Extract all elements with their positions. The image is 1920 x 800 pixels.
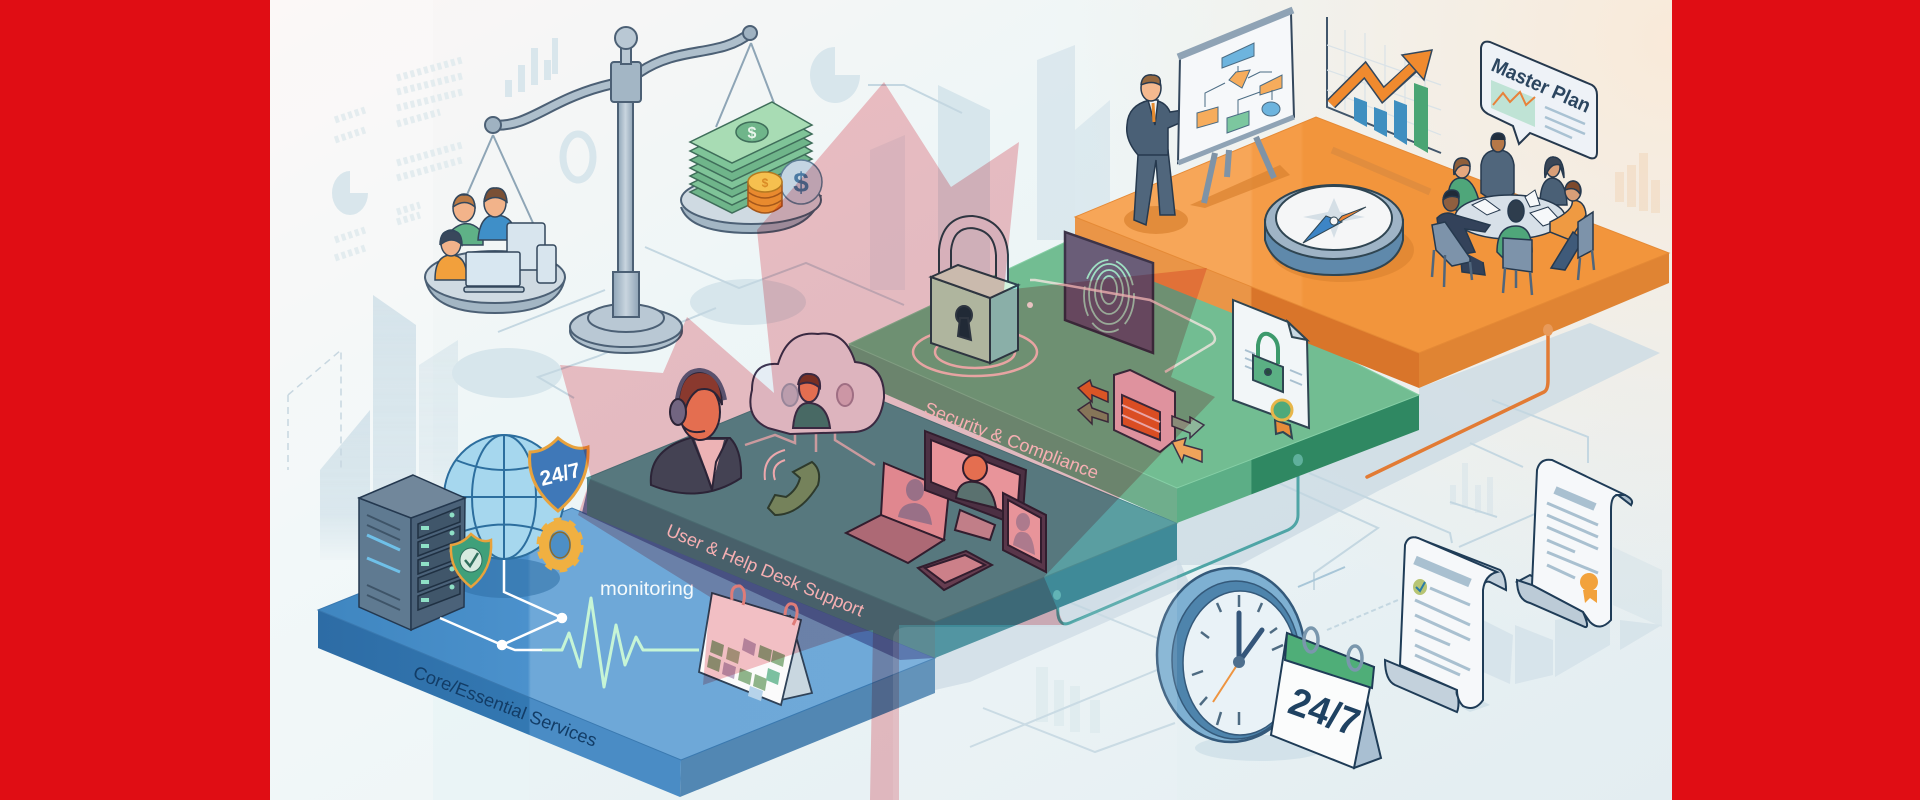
ghost floor ellipses — [452, 279, 806, 398]
presenter legs — [1134, 150, 1175, 225]
icon: meeting table group — [1432, 133, 1594, 295]
icon: people and devices on pan — [435, 188, 556, 292]
icon: growth chart — [1327, 17, 1441, 153]
24/7 calendar number: 24/7 — [1283, 680, 1365, 745]
presenter torso — [1127, 100, 1198, 155]
lock shackle — [945, 222, 1002, 295]
ghost buildings left — [288, 295, 458, 560]
monitoring network lines — [440, 560, 566, 650]
canvas background — [270, 0, 1672, 800]
compass needle — [1334, 207, 1366, 225]
person green — [447, 194, 483, 245]
connector: orange line — [1367, 333, 1548, 477]
icon: cloud with users — [750, 334, 884, 434]
icon: firewall — [1078, 370, 1204, 462]
master plan title: Master Plan — [1488, 54, 1594, 118]
icon: green shield check — [451, 534, 491, 587]
right chair — [1578, 212, 1594, 280]
icon: gear — [540, 521, 580, 569]
ghost buildings top centre — [870, 45, 1110, 290]
standing man — [1481, 133, 1514, 197]
person orange — [435, 230, 467, 280]
maple leaf overlay — [560, 82, 1215, 800]
label: User & Help Desk Support: User & Help Desk Support — [663, 520, 867, 621]
icon: balance scale — [425, 26, 821, 353]
left pan — [425, 277, 565, 313]
agent body — [651, 438, 741, 494]
icon: money stack and coins: $ — [762, 176, 769, 190]
firewall arrows — [1078, 380, 1204, 462]
icon: presentation board — [1178, 10, 1294, 203]
icon: money stack and coins — [690, 102, 822, 213]
table — [1455, 195, 1565, 239]
icon: clock — [1157, 568, 1305, 742]
platform: security and compliance (green) — [849, 230, 1419, 523]
documents on table — [1472, 190, 1560, 226]
clock ticks — [1192, 595, 1283, 725]
ghost ring — [563, 134, 593, 180]
icon: compliance document — [1233, 300, 1309, 438]
laptop base — [464, 287, 524, 292]
centre chair — [1503, 238, 1532, 295]
agent head — [680, 384, 720, 440]
tablet — [507, 223, 545, 270]
ghost bar chart top — [505, 38, 558, 97]
scroll one text lines — [1415, 560, 1470, 675]
floor shadow under scrolls — [1390, 665, 1490, 712]
scale strings — [466, 43, 774, 223]
scale base — [570, 100, 682, 353]
server side stripes — [367, 535, 400, 572]
ghost bars peach — [1615, 153, 1660, 213]
floor shadow under teal platform — [935, 555, 1190, 690]
pointer — [1196, 80, 1211, 105]
left chair — [1432, 222, 1472, 287]
silver coin — [780, 160, 822, 204]
circuit lines — [498, 85, 1588, 752]
red left margin — [0, 0, 270, 800]
right pan — [681, 195, 821, 233]
icon: contract scroll one — [1385, 537, 1506, 712]
ribbon — [1275, 420, 1292, 438]
icon: 24/7 calendar — [1271, 628, 1381, 768]
person blue — [478, 188, 515, 240]
scroll two seal — [1580, 573, 1598, 591]
heartbeat line — [542, 598, 699, 687]
label: monitoring: monitoring — [600, 579, 694, 600]
icon: compass — [1265, 185, 1403, 275]
icon: money stack and coins: $ — [748, 125, 757, 142]
connector: teal line — [1057, 460, 1298, 624]
gold coin stack — [748, 182, 782, 213]
floor shadow under clock — [1195, 735, 1325, 761]
icon: laptop — [846, 463, 949, 563]
icon: padlock — [913, 222, 1037, 376]
platform: strategy (orange) — [1075, 117, 1669, 388]
scroll two text lines — [1547, 490, 1598, 578]
man centre — [1497, 200, 1532, 258]
floor shadow under platforms — [1177, 323, 1660, 565]
platform: core/essential services (blue) — [318, 508, 935, 797]
icon: help desk agent — [651, 370, 741, 494]
icon: globe — [444, 435, 564, 559]
shadow cast on blue platform — [582, 478, 935, 660]
woman left — [1448, 158, 1480, 215]
ghost dot grid — [335, 60, 462, 258]
icon: tablet — [1003, 493, 1046, 572]
woman right — [1540, 157, 1567, 205]
ghost blocks lower right — [1483, 547, 1662, 684]
presenter head — [1141, 75, 1161, 101]
shadow under globe — [450, 558, 560, 598]
scale joint — [611, 62, 641, 102]
flowchart — [1197, 43, 1282, 133]
man left — [1437, 190, 1490, 275]
agent headset — [676, 370, 725, 410]
cloud user — [793, 403, 830, 428]
label: Security & Compliance: Security & Compliance — [922, 398, 1101, 483]
red right margin — [1672, 0, 1920, 800]
callout: master plan — [1481, 42, 1597, 158]
ghost pie charts — [332, 47, 860, 215]
cloud connectors — [745, 425, 875, 465]
icon: desktop monitor — [925, 431, 1026, 540]
platform: user and help desk support (teal) — [587, 379, 1177, 658]
icon: server rack — [359, 475, 465, 630]
icon: fingerprint tile — [1027, 232, 1215, 372]
icon: contract scroll two — [1517, 460, 1632, 627]
laptop — [466, 252, 520, 286]
server drive bays — [418, 507, 460, 610]
connector nodes — [1053, 324, 1553, 600]
background: city skyline and ghost charts — [288, 38, 1662, 733]
lock body — [990, 285, 1018, 363]
icon: 24/7 shield — [530, 438, 588, 511]
calendar cells — [707, 638, 785, 701]
server LEDs — [421, 512, 454, 602]
label: Core/Essential Services: Core/Essential Services — [411, 662, 600, 751]
icon: smartphone — [918, 551, 992, 590]
rounded highlight panel — [893, 565, 1177, 800]
icon: presenter — [1127, 75, 1211, 225]
clock hands — [1236, 613, 1242, 662]
icon: monitoring calendar — [699, 586, 812, 705]
scale beam — [493, 33, 750, 125]
icon: telephone — [765, 450, 819, 515]
phone — [537, 245, 556, 283]
icon: money stack and coins: $ — [793, 167, 809, 198]
growth arrow — [1331, 65, 1416, 104]
icon: 24/7 shield: 24/7 — [538, 459, 583, 491]
top banknote — [690, 102, 812, 163]
man right — [1550, 181, 1586, 270]
ghost bars lower — [1036, 463, 1493, 733]
